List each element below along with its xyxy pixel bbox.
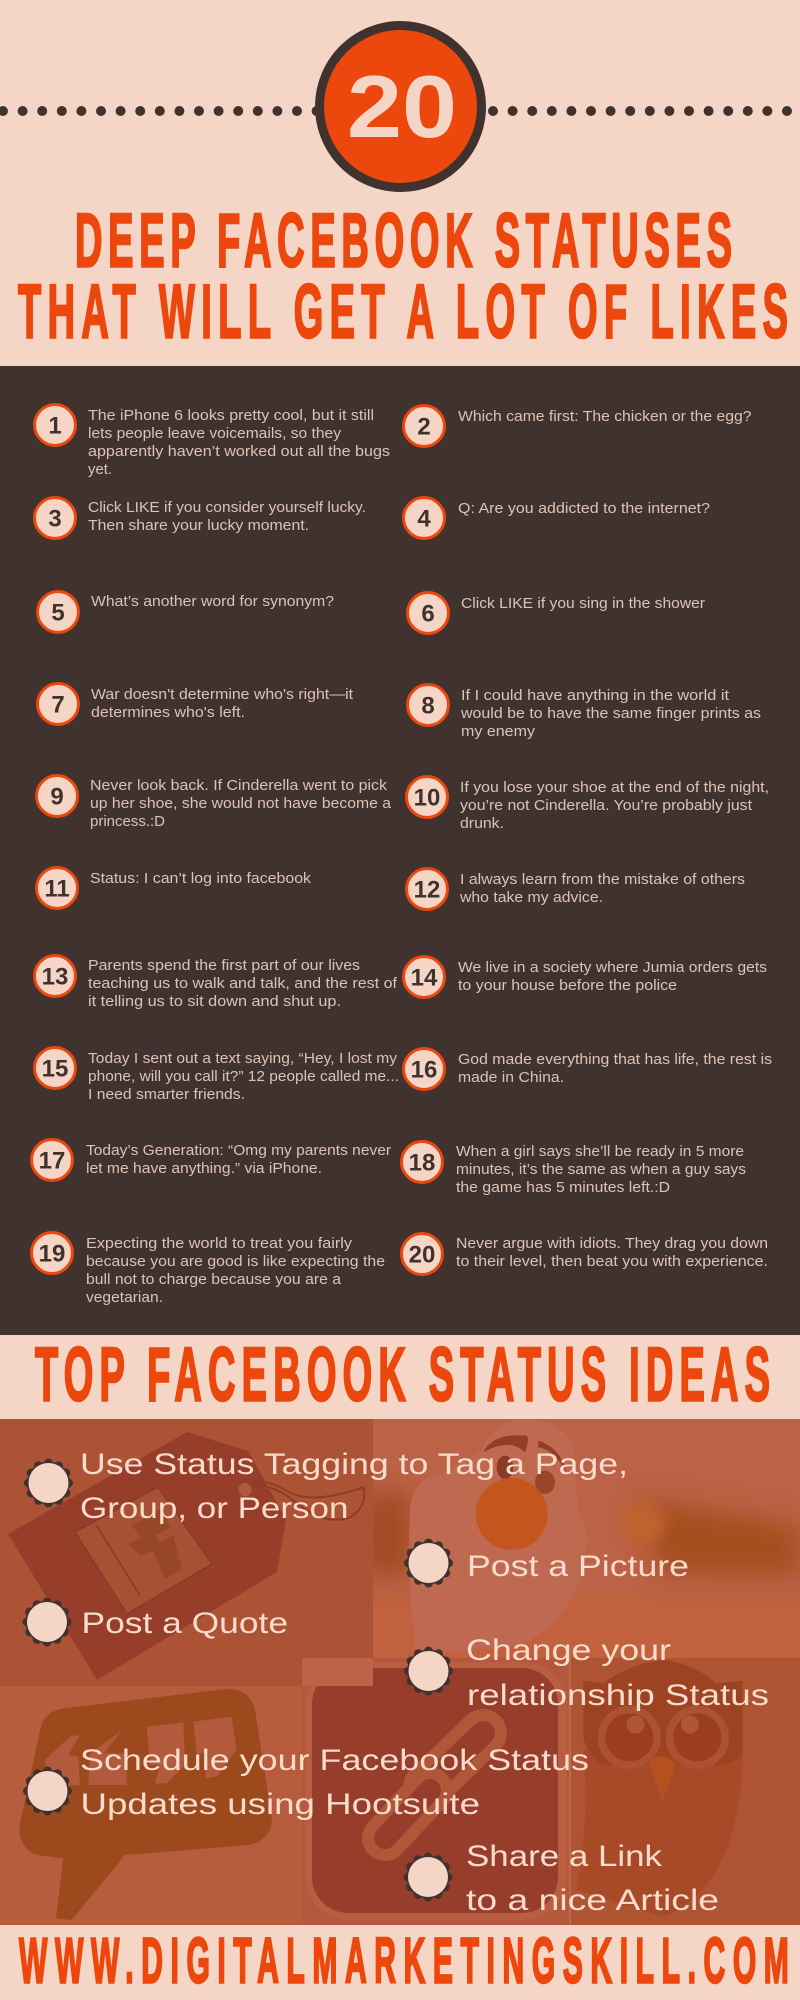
status 14 xyxy=(404,956,767,998)
status 11 xyxy=(36,868,312,908)
status 5: 5 xyxy=(51,600,65,626)
status 18 xyxy=(402,1142,746,1196)
photo: link icon xyxy=(302,1658,570,1925)
status 16 xyxy=(404,1048,772,1090)
footer website: WWW.DIGITALMARKETINGSKILL.COM xyxy=(19,1925,789,1997)
idea: status tagging xyxy=(24,1448,628,1525)
status 10: drunk. xyxy=(460,816,504,832)
status 12 xyxy=(406,868,745,910)
idea: schedule updates: Updates using Hootsuite xyxy=(80,1788,480,1821)
idea: schedule updates xyxy=(23,1744,589,1821)
status 17: let me have anything.” via iPhone. xyxy=(86,1161,322,1177)
status 18: When a girl says she’ll be ready in 5 more xyxy=(456,1144,744,1160)
status 17 xyxy=(32,1140,391,1180)
status 8 xyxy=(408,684,761,740)
status 20: to their level, then beat you with experience. xyxy=(456,1254,768,1270)
status 10: 10 xyxy=(414,784,440,812)
status 3 xyxy=(34,498,366,538)
status 20: 20 xyxy=(409,1242,435,1268)
status 16: made in China. xyxy=(458,1070,564,1086)
status 11: Status: I can’t log into facebook xyxy=(90,871,312,887)
badge: 20 xyxy=(320,26,482,188)
status 17: Today’s Generation: “Omg my parents never xyxy=(86,1143,391,1159)
photo: speech bubble xyxy=(0,1686,302,1925)
status 7 xyxy=(38,684,353,724)
status 8: 8 xyxy=(421,692,435,720)
status 15 xyxy=(34,1048,399,1103)
status 7: War doesn't determine who's right—it xyxy=(91,687,353,703)
status 7: determines who's left. xyxy=(91,705,245,721)
status 13: Parents spend the first part of our lives xyxy=(88,958,360,974)
status 2 xyxy=(404,406,752,446)
status 9: princess.:D xyxy=(90,814,165,830)
status 1: 1 xyxy=(48,412,62,440)
status 18: 18 xyxy=(409,1150,435,1176)
status 16: 16 xyxy=(411,1056,437,1084)
idea: post a picture xyxy=(404,1538,689,1588)
idea: post a quote: Post a Quote xyxy=(82,1607,288,1640)
status 1 xyxy=(34,404,390,478)
status 3: Then share your lucky moment. xyxy=(88,518,309,534)
status 1: apparently haven’t worked out all the bugs xyxy=(88,444,390,460)
title xyxy=(18,198,788,354)
status 19: because you are good is like expecting the xyxy=(86,1254,385,1270)
dotted line left xyxy=(3,106,320,116)
photo: facebook tag xyxy=(0,1419,373,1686)
status 10: you’re not Cinderella. You’re probably just xyxy=(460,798,752,814)
status 10 xyxy=(406,776,769,832)
heading: top facebook status ideas: TOP FACEBOOK STATUS IDEAS xyxy=(35,1332,770,1417)
idea: post a quote xyxy=(22,1598,288,1646)
status 9 xyxy=(36,776,392,830)
status 5 xyxy=(38,592,334,632)
photo: snowman xyxy=(363,1419,800,1658)
status 19: Expecting the world to treat you fairly xyxy=(86,1236,353,1252)
status 4 xyxy=(404,498,710,538)
badge: 20: 20 xyxy=(347,57,457,156)
idea: relationship status xyxy=(404,1634,769,1712)
status 6: Click LIKE if you sing in the shower xyxy=(461,596,705,612)
status 6: 6 xyxy=(421,600,435,628)
status 9: 9 xyxy=(50,784,64,810)
title: DEEP FACEBOOK STATUSES xyxy=(75,198,732,283)
status 2: Which came first: The chicken or the egg? xyxy=(458,409,752,425)
status 12: who take my advice. xyxy=(459,890,603,906)
idea: relationship status: relationship Status xyxy=(467,1679,769,1712)
title: THAT WILL GET A LOT OF LIKES xyxy=(18,269,788,354)
idea: status tagging: Use Status Tagging to Tag a Page, xyxy=(80,1448,628,1481)
status 18: minutes, it’s the same as when a guy says xyxy=(456,1162,746,1178)
status 3: 3 xyxy=(48,506,62,532)
status 8: my enemy xyxy=(461,724,536,740)
idea: relationship status: Change your xyxy=(466,1634,671,1667)
status 10: If you lose your shoe at the end of the night, xyxy=(460,780,769,796)
status 14: to your house before the police xyxy=(458,978,677,994)
idea: share a link xyxy=(404,1840,719,1917)
status 4: 4 xyxy=(417,506,431,532)
status 12: I always learn from the mistake of others xyxy=(460,872,745,888)
status 16: God made everything that has life, the rest is xyxy=(458,1052,772,1068)
status 1: lets people leave voicemails, so they xyxy=(88,426,342,442)
status 18: the game has 5 minutes left.:D xyxy=(456,1180,670,1196)
panel: statuses list xyxy=(0,366,800,1335)
status 8: would be to have the same finger prints as xyxy=(460,706,761,722)
status 6 xyxy=(408,592,705,634)
status 15: I need smarter friends. xyxy=(88,1087,245,1103)
status 2: 2 xyxy=(417,414,431,440)
status 15: phone, will you call it?” 12 people called me... xyxy=(88,1069,399,1085)
idea: share a link: Share a Link xyxy=(466,1840,663,1873)
status 9: Never look back. If Cinderella went to pick xyxy=(90,778,388,794)
status 1: yet. xyxy=(88,462,112,478)
status 11: 11 xyxy=(44,876,70,902)
status 17: 17 xyxy=(39,1148,65,1174)
dotted line right xyxy=(493,106,790,116)
status 14: 14 xyxy=(411,964,438,992)
status 13: it telling us to sit down and shut up. xyxy=(88,994,341,1010)
idea: post a picture: Post a Picture xyxy=(467,1550,689,1583)
status 19: bull not to charge because you are a xyxy=(86,1272,342,1288)
status 13 xyxy=(34,956,398,1010)
status 1: The iPhone 6 looks pretty cool, but it still xyxy=(88,408,374,424)
status 15: 15 xyxy=(42,1056,68,1082)
status 4: Q: Are you addicted to the internet? xyxy=(458,501,710,517)
status 8: If I could have anything in the world it xyxy=(461,688,729,704)
idea: share a link: to a nice Article xyxy=(466,1884,719,1917)
status 19 xyxy=(32,1232,385,1306)
idea: status tagging: Group, or Person xyxy=(80,1492,348,1525)
status 9: up her shoe, she would not have become a xyxy=(90,796,392,812)
status 14: We live in a society where Jumia orders gets xyxy=(458,960,767,976)
status 7: 7 xyxy=(51,692,65,718)
idea: schedule updates: Schedule your Facebook Status xyxy=(80,1744,589,1777)
header panel xyxy=(0,0,800,366)
status 12: 12 xyxy=(414,876,440,904)
status 13: 13 xyxy=(42,964,68,990)
status 20: Never argue with idiots. They drag you down xyxy=(456,1236,768,1252)
status 3: Click LIKE if you consider yourself lucky. xyxy=(88,500,366,516)
status 15: Today I sent out a text saying, “Hey, I lost my xyxy=(88,1051,398,1067)
status 20 xyxy=(402,1234,768,1274)
status 13: teaching us to walk and talk, and the rest of xyxy=(88,976,398,992)
status 5: What’s another word for synonym? xyxy=(91,594,334,610)
panel: status ideas xyxy=(0,1419,800,1925)
status 19: vegetarian. xyxy=(86,1290,163,1306)
photo: owl xyxy=(569,1658,800,1925)
status 19: 19 xyxy=(39,1240,65,1268)
